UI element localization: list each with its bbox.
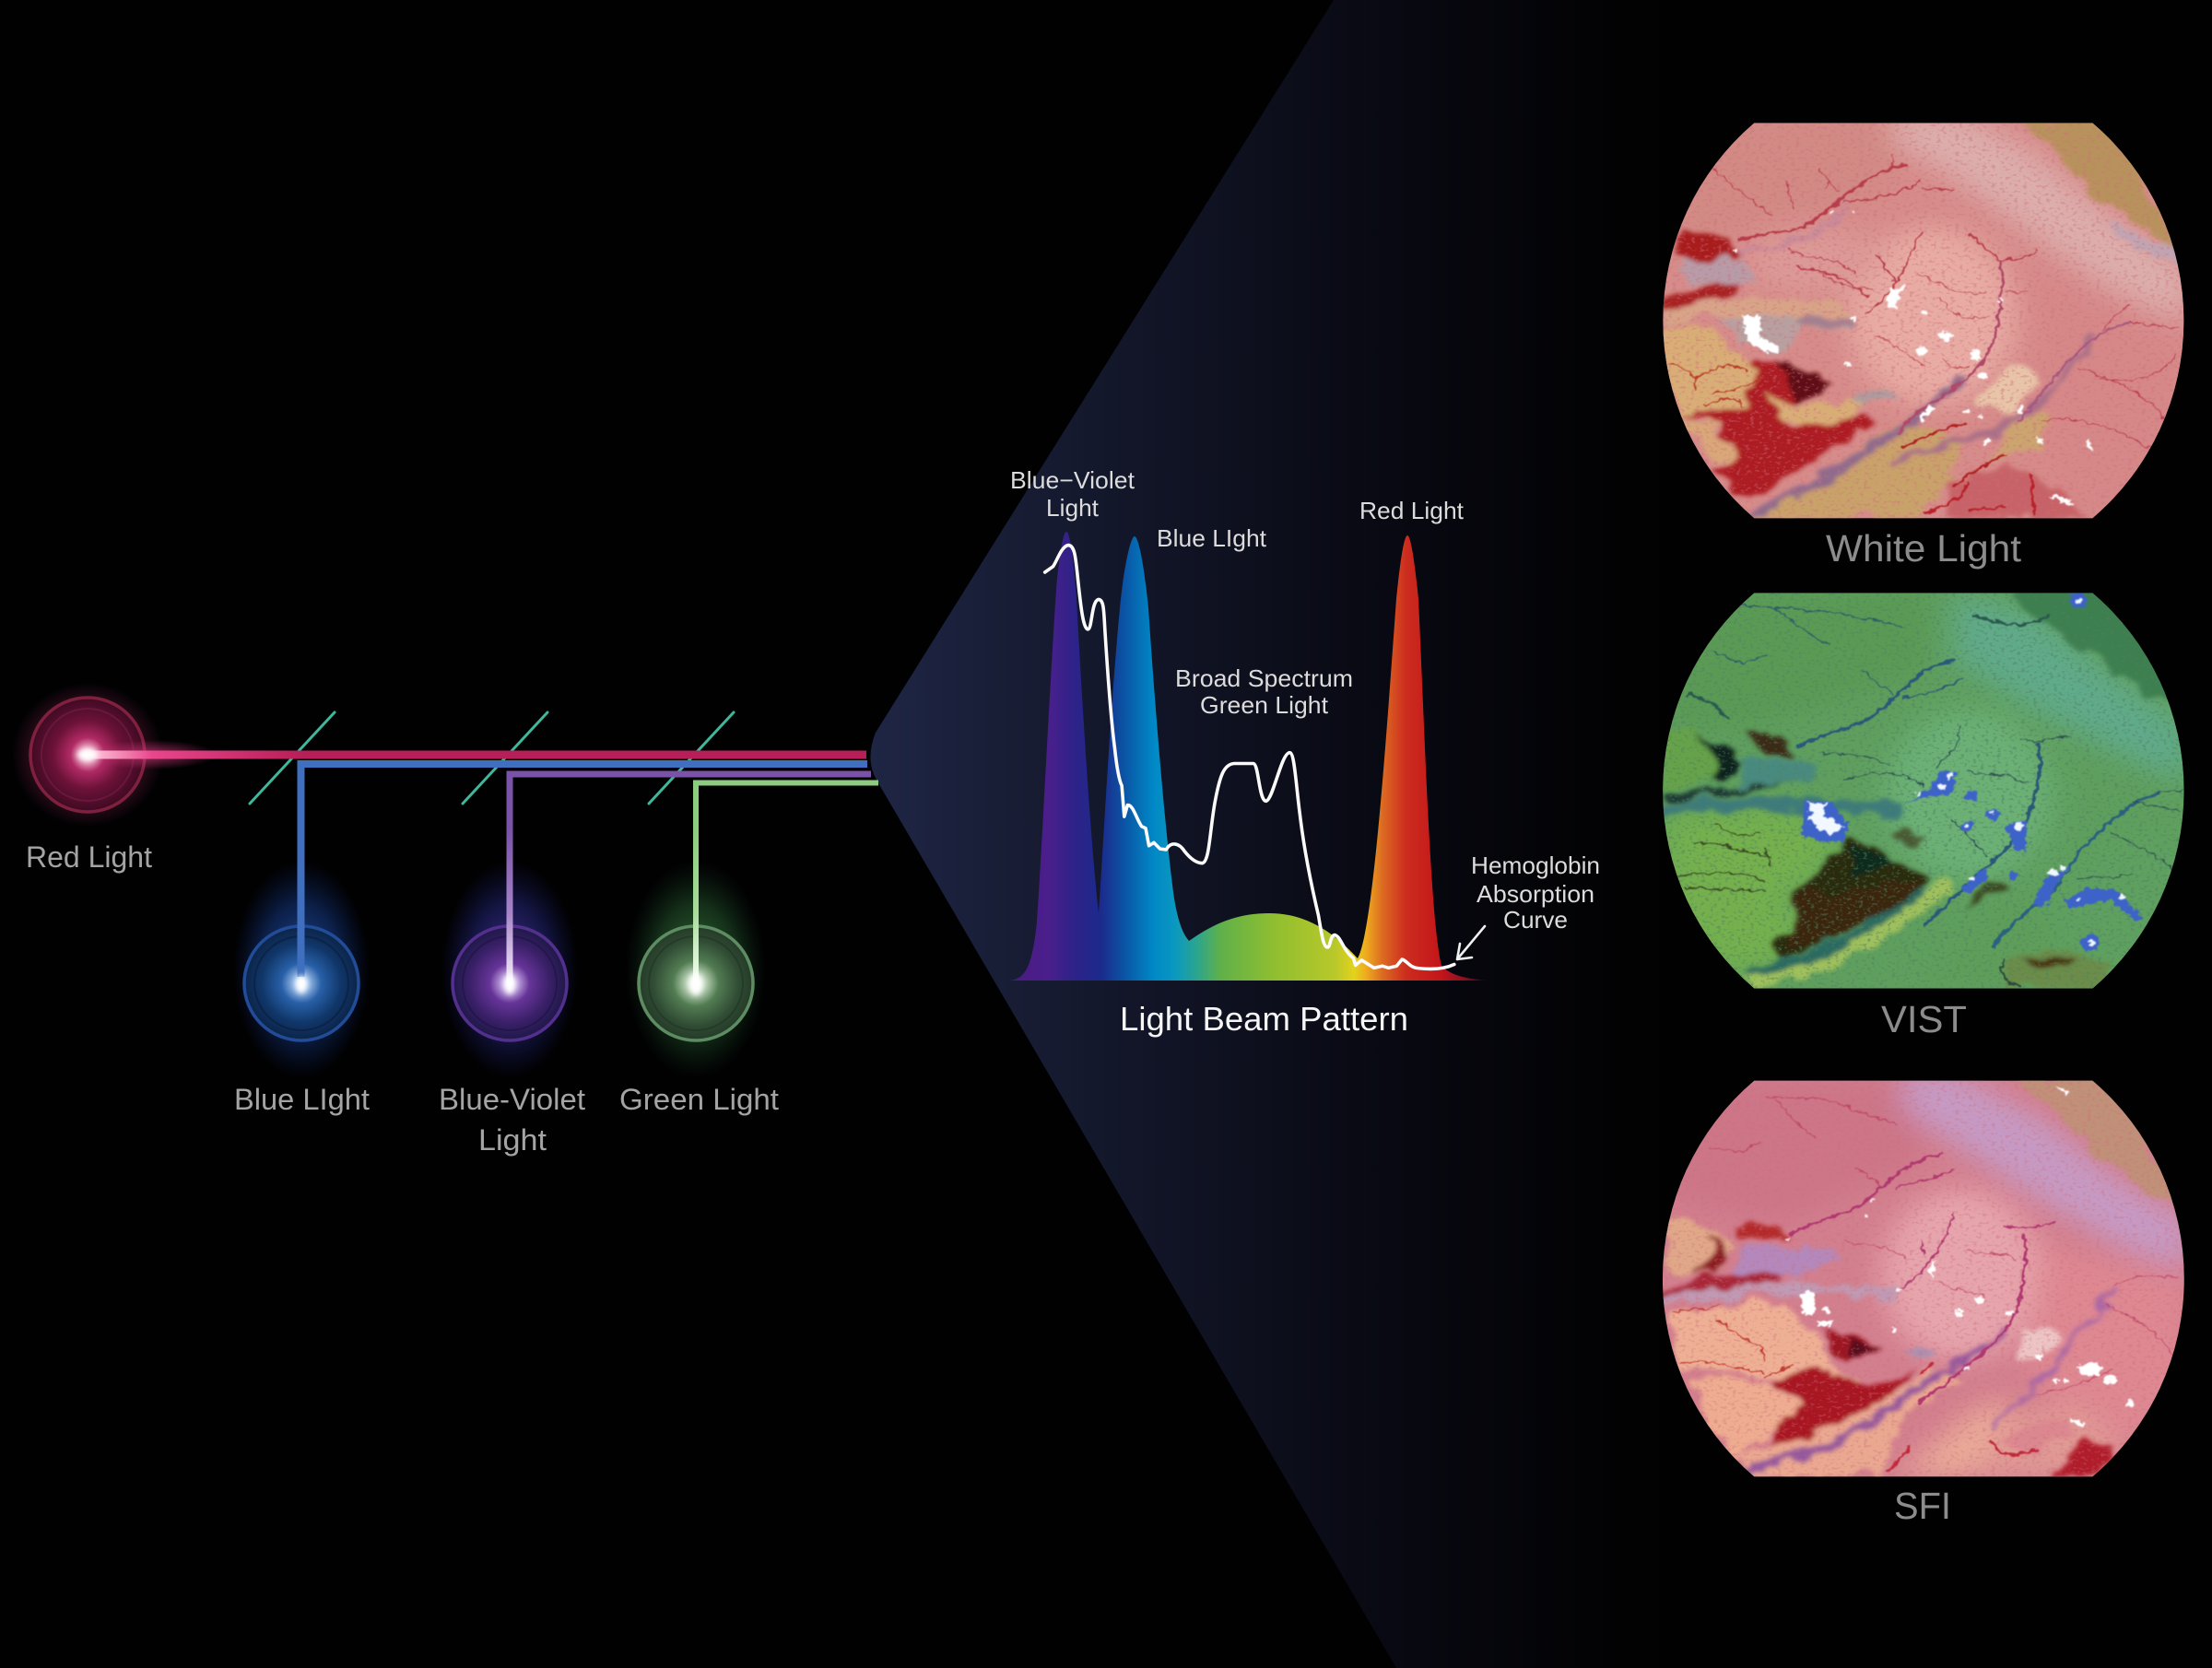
panel: SFI image xyxy=(1663,1080,2184,1476)
label: hemoglobin curve: Curve xyxy=(1503,906,1568,934)
icon: blue-violet LED xyxy=(441,861,578,1078)
label: blue-violet peak: Light xyxy=(1046,494,1100,522)
label: VIST: VIST xyxy=(1881,998,1967,1040)
label: blue-violet light: Blue-Violet xyxy=(439,1083,585,1116)
hemoglobin absorption curve xyxy=(1045,546,1454,969)
label: hemoglobin curve: Absorption xyxy=(1477,880,1594,908)
light cone xyxy=(870,0,1659,1668)
icon: blue LED xyxy=(233,861,370,1078)
icon: green LED xyxy=(626,861,766,1078)
beam: green light xyxy=(696,783,878,982)
label: blue peak: Blue LIght xyxy=(1157,524,1267,552)
label: green peak: Green Light xyxy=(1200,691,1329,719)
label: white light: White Light xyxy=(1826,527,2022,570)
beam: red light xyxy=(88,750,866,759)
icon: red LED xyxy=(12,683,217,827)
label: hemoglobin curve: Hemoglobin xyxy=(1471,852,1600,879)
label: red peak: Red Light xyxy=(1359,497,1465,524)
label: blue-violet light: Light xyxy=(478,1123,547,1157)
arrow to curve xyxy=(1457,926,1485,959)
label: blue light: Blue LIght xyxy=(234,1083,370,1116)
beam: blue-violet light xyxy=(510,774,871,982)
label: blue-violet peak: Blue−Violet xyxy=(1010,466,1135,494)
dichroic mirrors xyxy=(250,712,734,804)
label: red light: Red Light xyxy=(26,840,152,874)
spectrum area xyxy=(1010,532,1488,981)
panel: white light image xyxy=(1663,123,2184,518)
label: SFI: SFI xyxy=(1894,1485,1951,1527)
panel: light beam pattern chart xyxy=(1010,466,1600,1038)
panel: light sources and beam paths xyxy=(12,683,878,1157)
panel: VIST image xyxy=(1663,593,2184,989)
label: green light: Green Light xyxy=(619,1083,779,1116)
label: green peak: Broad Spectrum xyxy=(1175,664,1353,692)
LED hot spots xyxy=(77,749,702,995)
chart title: Light Beam Pattern xyxy=(1120,1000,1408,1038)
beam: blue light xyxy=(300,764,867,977)
